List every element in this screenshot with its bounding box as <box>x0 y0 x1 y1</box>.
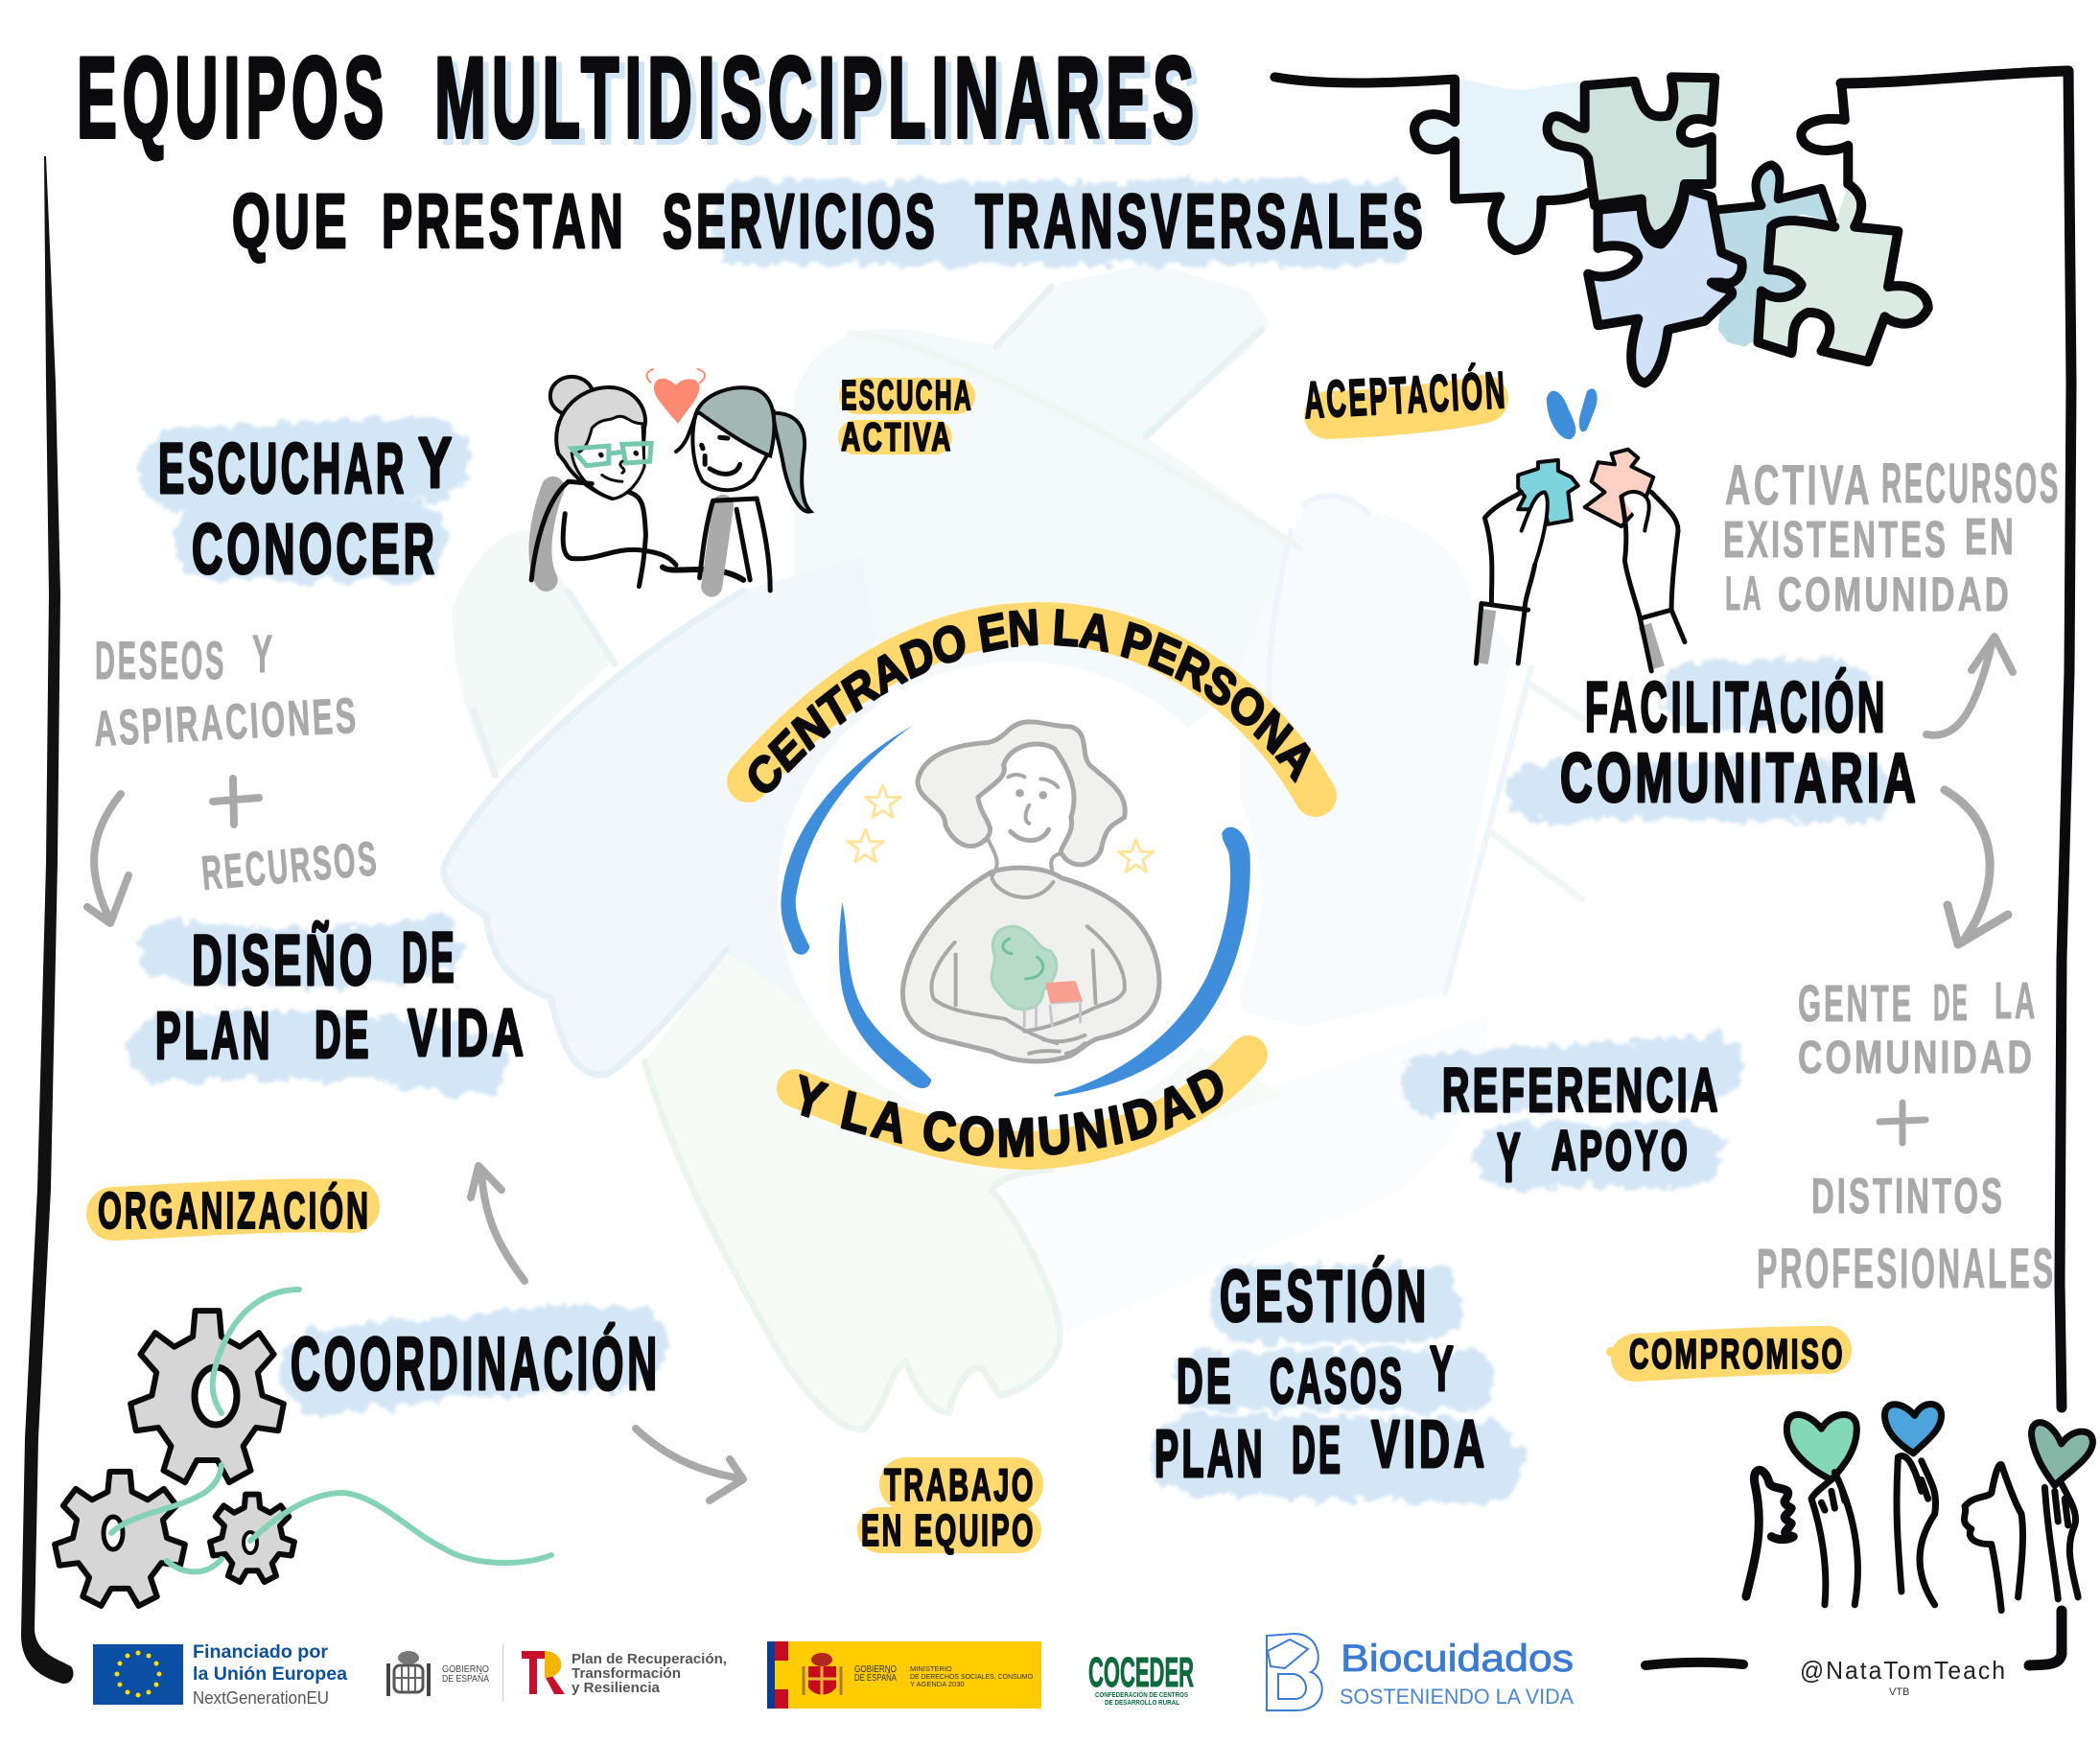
central banner: centrado en la persona: CENTRADO EN LA PERSONA <box>748 608 1311 794</box>
subtitle with brush highlight <box>232 178 1427 264</box>
label: gestión de casos y plan de vida: DE <box>1177 1345 1234 1416</box>
title word: multidisciplinares: MULTIDISCIPLINARES <box>434 34 1200 162</box>
tag: trabajo en equipo <box>861 1459 1036 1555</box>
logo: plan de recuperación: Plan de Recuperación, <box>572 1651 727 1667</box>
frame: left border <box>21 156 74 1684</box>
central figure: person with tree and house in a blue ring <box>781 722 1250 1097</box>
label: escuchar y conocer: CONOCER <box>192 509 438 589</box>
tag: compromiso: COMPROMISO <box>1629 1331 1845 1378</box>
text: activa recursos existentes en la comunidad: LA <box>1725 567 1763 620</box>
title line one <box>77 34 1200 162</box>
label: diseño de plan de vida: PLAN <box>155 998 273 1073</box>
label: gestión de casos y plan de vida <box>1155 1256 1488 1491</box>
arrow: coordinación to diseño <box>471 1166 525 1281</box>
logo: ministerio de derechos sociales: GOBIERNO <box>854 1664 897 1675</box>
label: diseño de plan de vida: DISEÑO <box>192 920 376 1000</box>
text: activa recursos existentes en la comunidad: ACTIVA <box>1725 454 1873 517</box>
text: activa recursos existentes en la comunidad: EXISTENTES <box>1723 511 1948 569</box>
label: escuchar y conocer: Y <box>418 423 456 502</box>
arrow: up to activa recursos <box>1926 637 2013 735</box>
text: financiado por la unión europea: NextGenerationEU <box>193 1688 329 1708</box>
frame: bottom short stroke <box>1645 1663 1743 1665</box>
label: gestión de casos y plan de vida: GESTIÓN <box>1220 1256 1430 1337</box>
text: deseos y aspiraciones + recursos: DESEOS <box>95 630 226 690</box>
text: deseos y aspiraciones + recursos <box>93 623 381 900</box>
logo: plan de recuperación <box>522 1651 727 1696</box>
tag: compromiso <box>1611 1331 1845 1378</box>
label: facilitación comunitaria <box>1539 667 1920 817</box>
logo: plan de recuperación: Transformación <box>572 1665 681 1682</box>
footer logos <box>93 1634 2007 1710</box>
tag: organización: ORGANIZACIÓN <box>98 1182 371 1240</box>
label: escuchar y conocer <box>158 423 456 589</box>
label: gestión de casos y plan de vida: PLAN <box>1155 1416 1266 1491</box>
icon: jigsaw puzzle pieces <box>1274 77 1928 384</box>
text: deseos y aspiraciones + recursos: ASPIRACIONES <box>93 688 360 757</box>
text: activa recursos existentes en la comunidad: EN <box>1965 508 2017 566</box>
logo: ministerio de derechos sociales <box>767 1641 1041 1709</box>
icon: raised hands with hearts <box>1746 1405 2092 1611</box>
text: financiado por la unión europea: la Unión Europea <box>193 1664 347 1685</box>
logo: eu flag <box>93 1644 183 1705</box>
icon: hands joining puzzle pieces <box>1476 450 1685 671</box>
signature: natatomteach: @NataTomTeach <box>1800 1656 2007 1685</box>
label: gestión de casos y plan de vida: DE <box>1292 1412 1343 1487</box>
icon: grandmother and girl holding hands <box>531 369 810 591</box>
logo: biocuidados <box>1267 1634 1574 1710</box>
label: referencia y apoyo: REFERENCIA <box>1442 1056 1721 1125</box>
icon: three gears with green thread <box>55 1290 551 1606</box>
icon: blue exclamation marks <box>1547 388 1598 439</box>
label: escuchar y conocer: ESCUCHAR <box>158 429 408 508</box>
logo: plan de recuperación: y Resiliencia <box>572 1680 661 1696</box>
tag: escucha activa: ACTIVA <box>841 414 953 459</box>
title word: equipos: EQUIPOS <box>77 34 389 162</box>
label: coordinación: COORDINACIÓN <box>291 1321 661 1406</box>
text: gente de la comunidad + distintos profesionales: DE <box>1933 974 1970 1032</box>
label: referencia y apoyo <box>1434 1056 1721 1197</box>
logo: biocuidados: Biocuidados <box>1341 1638 1574 1680</box>
tag: escucha activa: ESCUCHA <box>841 372 973 419</box>
subtitle with brush highlight: PRESTAN <box>382 178 627 264</box>
arrow: coordinación to trabajo en equipo <box>636 1429 743 1500</box>
tag: organización <box>98 1182 371 1240</box>
label: referencia y apoyo: APOYO <box>1552 1120 1691 1182</box>
tag: aceptación: ACEPTACIÓN <box>1302 361 1508 430</box>
logo: gobierno de españa, escudo: DE ESPAÑA <box>442 1672 489 1685</box>
signature: natatomteach: VTB <box>1889 1686 1909 1698</box>
logo: ministerio de derechos sociales: Y AGENDA 2030 <box>910 1680 965 1688</box>
signature: natatomteach <box>1800 1656 2007 1698</box>
text: deseos y aspiraciones + recursos: RECURSOS <box>199 831 381 900</box>
text: gente de la comunidad + distintos profesionales: GENTE <box>1798 975 1914 1033</box>
text: gente de la comunidad + distintos profesionales: LA <box>1995 972 2038 1030</box>
label: diseño de plan de vida <box>155 918 527 1073</box>
label: coordinación <box>291 1321 661 1406</box>
text: deseos y aspiraciones + recursos: Y <box>252 623 275 684</box>
text: financiado por la unión europea <box>193 1642 347 1708</box>
arrow: down to gente de la comunidad <box>1945 790 2008 944</box>
logo: gobierno de españa, escudo <box>388 1651 489 1696</box>
frame: right border <box>1841 71 2071 1665</box>
label: referencia y apoyo: Y <box>1497 1120 1524 1197</box>
subtitle with brush highlight: TRANSVERSALES <box>975 178 1427 264</box>
label: gestión de casos y plan de vida: Y <box>1430 1333 1457 1404</box>
text: activa recursos existentes en la comunidad <box>1723 453 2061 621</box>
logo: coceder: DE DESARROLLO RURAL <box>1105 1700 1180 1707</box>
logo: biocuidados: SOSTENIENDO LA VIDA <box>1340 1685 1574 1709</box>
logo: gobierno de españa, escudo: GOBIERNO <box>442 1664 489 1675</box>
white disc behind central figure <box>778 662 1261 1126</box>
tag: aceptación <box>1302 361 1508 430</box>
logo: ministerio de derechos sociales: DE DERECHOS SOCIALES, CONSUMO <box>910 1672 1033 1681</box>
label: gestión de casos y plan de vida: CASOS <box>1270 1345 1405 1416</box>
logo: coceder <box>1088 1649 1194 1707</box>
logo: ministerio de derechos sociales: MINISTERIO <box>910 1664 952 1673</box>
logo: coceder: CONFEDERACIÓN DE CENTROS <box>1095 1690 1188 1699</box>
subtitle with brush highlight: SERVICIOS <box>663 178 939 264</box>
logo: ministerio de derechos sociales: DE ESPAÑA <box>854 1671 897 1684</box>
central banner: y la comunidad: Y LA COMUNIDAD <box>799 1069 1224 1158</box>
text: financiado por la unión europea: Financiado por <box>193 1642 329 1663</box>
label: diseño de plan de vida: DE <box>315 997 372 1072</box>
footer logos: COCEDER <box>1088 1649 1194 1696</box>
label: facilitación comunitaria: COMUNITARIA <box>1560 740 1920 817</box>
subtitle with brush highlight: QUE <box>232 178 351 264</box>
background: faded hands holding the centre <box>444 264 1582 1430</box>
arrow: down to diseño de plan de vida <box>87 794 128 923</box>
tag: trabajo en equipo: EN EQUIPO <box>861 1505 1036 1555</box>
tag: trabajo en equipo: TRABAJO <box>884 1459 1036 1510</box>
label: diseño de plan de vida: DE <box>402 918 457 997</box>
label: gestión de casos y plan de vida: VIDA <box>1371 1407 1488 1481</box>
label: diseño de plan de vida: VIDA <box>408 995 527 1070</box>
text: gente de la comunidad + distintos profesionales <box>1757 972 2056 1300</box>
tag: escucha activa <box>841 372 973 459</box>
